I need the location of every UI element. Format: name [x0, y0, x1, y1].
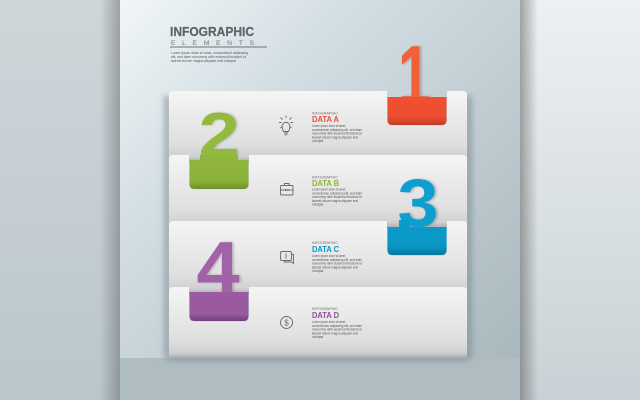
notch: purple — [190, 292, 248, 321]
numeral 1: 1 — [398, 29, 430, 124]
text: description B — [312, 188, 362, 207]
title rule — [170, 46, 267, 48]
numeral 4: 4 — [196, 228, 240, 309]
icon: briefcase — [280, 184, 293, 195]
text: description C: volutpat. — [312, 269, 324, 273]
icon: dollar coin — [280, 316, 292, 328]
icon: light bulb — [279, 116, 293, 135]
notch: green — [190, 155, 248, 189]
title description: Lorem ipsum dolor sit amet, consectetuer adipiscing — [171, 51, 248, 55]
right wall shadow — [520, 0, 538, 400]
text: description A: nonummy nibh euismod tincidunt ut — [312, 132, 362, 136]
text: description C — [312, 254, 362, 273]
text: description C: Lorem ipsum dolor sit amet, — [312, 254, 346, 258]
left wall shadow — [100, 0, 120, 400]
title description: elit, sed diam nonummy nibh euismod tincidunt ut — [171, 55, 246, 59]
numeral 2: 2 — [200, 101, 241, 170]
icon: chat bubbles — [280, 252, 294, 264]
text: description D: Lorem ipsum dolor sit amet, — [312, 320, 346, 324]
numeral 1: 1 — [400, 29, 432, 124]
text: description A: laoreet dolore magna aliquam erat — [312, 135, 358, 139]
text: description D — [312, 320, 362, 339]
title block — [170, 24, 267, 63]
text: description A — [312, 124, 362, 143]
text: description D: volutpat. — [312, 335, 324, 339]
numeral 3: 3 — [400, 165, 440, 241]
text: description B: laoreet dolore magna aliquam erat — [312, 199, 358, 203]
notch: red — [388, 97, 446, 125]
text: description B: volutpat. — [312, 203, 324, 207]
heading: infographic: INFOGRAPHIC — [170, 24, 254, 39]
label: data D: DATA D — [312, 311, 339, 320]
numeral 4: 4 — [198, 228, 241, 309]
panel D — [169, 287, 467, 358]
text: description A: consectetuer adipiscing elit, sed diam — [312, 128, 362, 132]
panel C — [169, 221, 467, 294]
label: infographic A: INFOGRAPHIC — [312, 110, 338, 116]
text: description A: volutpat. — [312, 139, 324, 143]
numeral 2: 2 — [198, 101, 240, 170]
label: data A: DATA A — [312, 115, 339, 124]
centre sheet — [120, 0, 520, 400]
text: description B: nonummy nibh euismod tincidunt ut — [312, 195, 362, 199]
text: description B: consectetuer adipiscing elit, sed diam — [312, 191, 362, 195]
notch: blue — [388, 220, 446, 255]
title description — [171, 51, 248, 63]
heading: elements: ELEMENTS — [171, 40, 255, 47]
label: infographic D: INFOGRAPHIC — [312, 306, 338, 311]
panel B — [169, 155, 467, 228]
floor shadow band — [120, 358, 520, 400]
text: description D: laoreet dolore magna aliquam erat — [312, 331, 358, 335]
label: data C: DATA C — [312, 245, 339, 254]
right background wall — [520, 0, 640, 400]
panel shadows — [164, 96, 472, 361]
text: description D: consectetuer adipiscing elit, sed diam — [312, 324, 362, 328]
text: description C: nonummy nibh euismod tincidunt ut — [312, 262, 362, 266]
text: description D: nonummy nibh euismod tincidunt ut — [312, 328, 362, 332]
text: description C: laoreet dolore magna aliquam erat — [312, 265, 358, 269]
numeral 3: 3 — [398, 165, 438, 241]
title description: laoreet dolore magna aliquam erat volutpat — [171, 59, 236, 63]
icon: dollar coin: $ — [284, 318, 289, 328]
label: infographic B: INFOGRAPHIC — [312, 174, 338, 180]
left background wall — [0, 0, 120, 400]
text: description B: Lorem ipsum dolor sit amet, — [312, 188, 346, 192]
panel A — [169, 91, 467, 162]
text: description C: consectetuer adipiscing elit, sed diam — [312, 258, 362, 262]
text: description A: Lorem ipsum dolor sit amet, — [312, 124, 346, 128]
label: data B: DATA B — [312, 179, 339, 188]
label: infographic C: INFOGRAPHIC — [312, 240, 338, 245]
